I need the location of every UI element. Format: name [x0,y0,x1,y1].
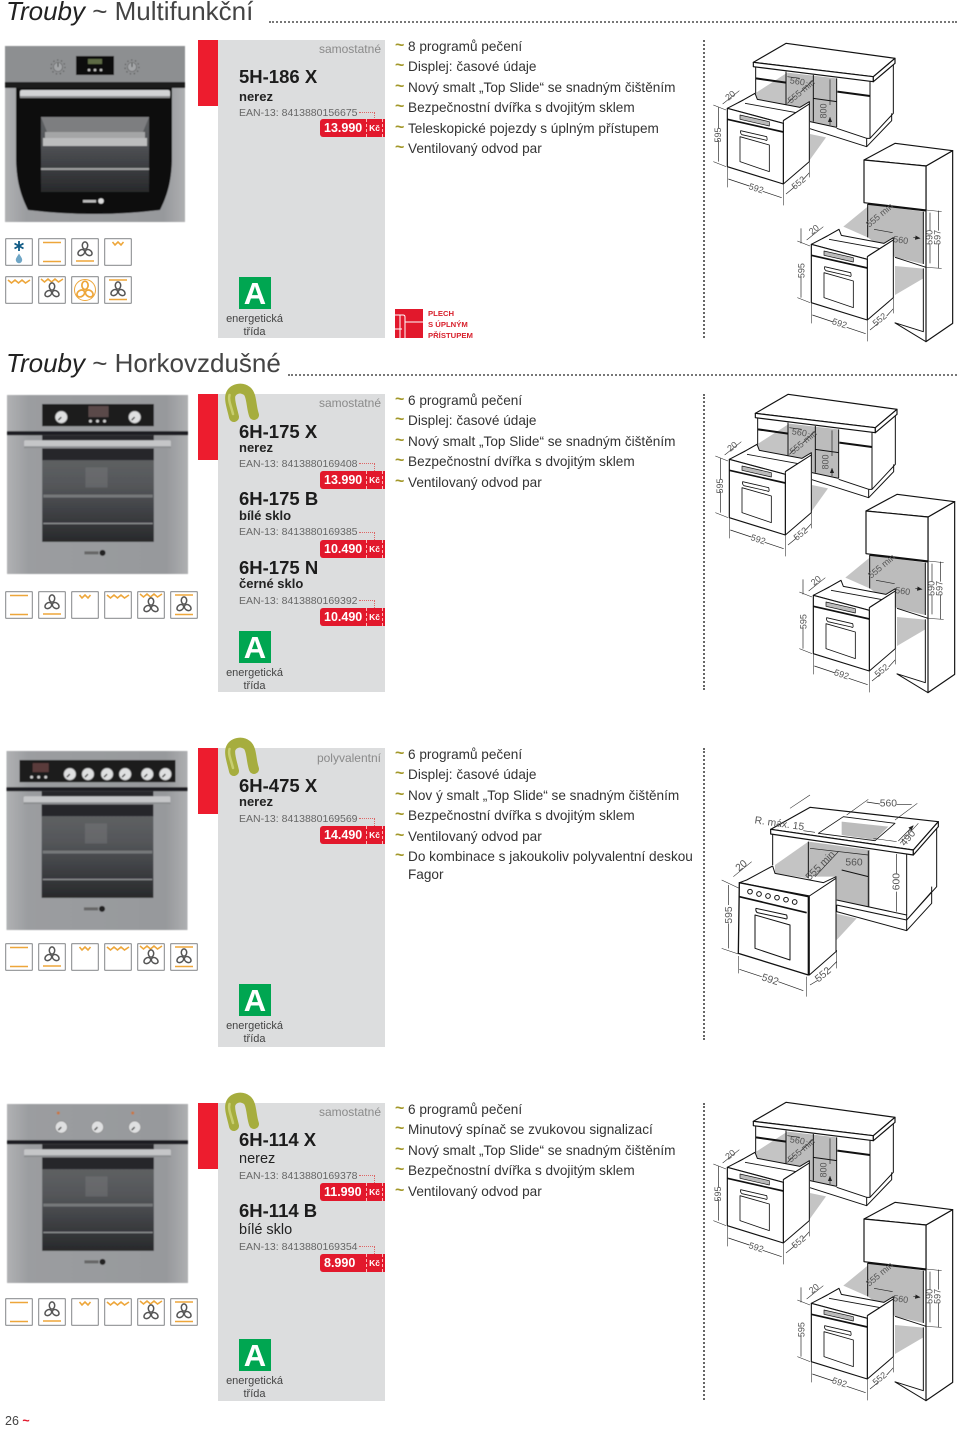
feature list: 6H-475 X: Nov ý smalt „Top Slide“ se snadným čištěním [408,788,679,803]
panel: 6H-114: nerez [239,1151,275,1167]
icons: cooking functions 6H-475 X [5,943,198,971]
diagram: built-in dimensions 6H-175: 597 [934,581,944,596]
price: Kč [369,612,380,622]
icon: green ribbon [225,384,259,422]
diagram: built-in dimensions 6H-114: 552 [871,1370,889,1387]
diagram: built-in dimensions 5H-186 X: 552 [790,174,808,192]
diagram: built-in dimensions 6H-114: 560 [789,1134,806,1146]
accent: red tab [198,394,218,460]
price: 13.990 [324,120,362,134]
price: 14.490 [324,828,362,842]
diagram: built-in dimensions 6H-175: 560 [895,585,911,597]
diagram: built-in dimensions 6H-475 X: 552 [813,965,834,985]
diagram: built-in dimensions 5H-186 X: 597 [932,230,942,245]
panel: 6H-175: nerez [239,440,273,455]
diagram: built-in dimensions 6H-114: 552 [790,1233,808,1251]
icon: defrost [6,239,32,265]
panel: 6H-114: bílé sklo [239,1222,292,1238]
diagram: built-in dimensions 6H-114: 592 [748,1240,765,1254]
badge: plech s úplným přístupem: PŘÍSTUPEM [428,331,473,340]
price [320,1254,385,1272]
feature list: 6H-475 X: Bezpečnostní dvířka s dvojitým sklem [408,808,635,823]
panel: 5H-186 X [218,40,385,338]
diagram: built-in dimensions 6H-114: 595 [713,1186,723,1202]
oven photo: 5H-186 X [4,45,186,222]
panel: 6H-114: EAN-13: 8413880169354 [239,1240,358,1252]
feature list: 6H-175: Displej: časové údaje [408,413,536,428]
energy class [239,277,271,309]
diagram: built-in dimensions 6H-475 X: 490 [899,828,918,849]
panel: 5H-186 X: energetická [226,313,283,325]
feature list: 5H-186 X: Teleskopické pojezdy s úplným přístupem [408,121,659,136]
icons: cooking functions 5H-186 X [5,238,132,304]
energy class [239,631,271,663]
diagram: built-in dimensions 6H-175: 555 min [866,552,897,580]
price [320,608,385,626]
diagram: built-in dimensions 5H-186 X: 555 min [786,77,817,105]
feature list: 6H-175 [396,393,675,490]
diagram: built-in dimensions 6H-475 X [722,794,939,997]
page number: 26 ~ [5,1414,30,1428]
diagram: built-in dimensions 6H-475 X: 560 [880,799,897,810]
feature list: 5H-186 X: Nový smalt „Top Slide“ se snadným čištěním [408,80,675,95]
oven photo: 6H-175 [6,394,189,575]
panel: 5H-186 X: samostatné [319,42,381,56]
diagram: built-in dimensions 5H-186 X: 595 [796,263,806,278]
price [320,540,385,558]
price: Kč [369,475,380,485]
feature list: 6H-475 X: Displej: časové údaje [408,767,536,782]
panel: 6H-475 X: třída [243,1032,266,1044]
diagram: built-in dimensions 5H-186 X: 20 [723,88,737,103]
price: Kč [369,830,380,840]
energy class [239,984,271,1016]
diagram: built-in dimensions 6H-114: 590 [924,1289,934,1304]
diagram: built-in dimensions 5H-186 X: 552 [871,311,889,328]
diagram: built-in dimensions 5H-186 X [713,42,954,342]
feature list: 6H-114: Ventilovaný odvod par [408,1184,542,1199]
panel: 6H-175: EAN-13: 8413880169408 [239,458,358,470]
feature list: 5H-186 X: Displej: časové údaje [408,59,536,74]
panel: 5H-186 X: nerez [239,89,273,104]
panel: 6H-175: samostatné [319,396,381,410]
badge: plech s úplným přístupem: S ÚPLNÝM [428,320,468,329]
feature list: 6H-114: 6 programů pečení [408,1102,522,1117]
energy class: A [244,630,266,665]
panel: 6H-175 [218,394,385,692]
diagram: built-in dimensions 6H-475 X: 555 min [804,849,838,883]
diagram: built-in dimensions 5H-186 X: 800 [818,103,828,119]
icons: cooking functions 6H-175 [5,591,198,619]
feature list: 5H-186 X: Bezpečnostní dvířka s dvojitým sklem [408,100,635,115]
diagram: built-in dimensions 6H-475 X: 592 [760,972,780,988]
model 6H-114 B: 6H-114 B [239,1200,317,1221]
price: 13.990 [324,473,362,487]
diagram: built-in dimensions 6H-114: 555 min [786,1136,817,1164]
diagram: built-in dimensions 6H-175: 595 [798,614,808,629]
panel: 6H-475 X [218,748,385,1047]
diagram: built-in dimensions 6H-175: 555 min [788,428,819,456]
diagram: built-in dimensions 6H-114 [713,1102,954,1402]
diagram: built-in dimensions 5H-186 X: 592 [748,181,765,195]
feature list: 6H-175: Ventilovaný odvod par [408,475,542,490]
price: 8.990 [324,1256,355,1270]
panel: 6H-114: samostatné [319,1105,381,1119]
diagram: built-in dimensions 5H-186 X: 595 [713,127,723,143]
price [320,1183,385,1201]
price: 10.490 [324,610,362,624]
panel: 6H-475 X: nerez [239,794,273,809]
diagram: built-in dimensions 6H-175: 20 [809,573,823,588]
diagram: built-in dimensions 6H-475 X: 560 [845,857,863,868]
diagram: built-in dimensions 6H-475 X: R. máx. 15 [754,815,805,833]
feature list: 6H-175: Nový smalt „Top Slide“ se snadným čištěním [408,434,675,449]
accent: red tab [198,1103,218,1169]
feature list: 6H-114: Nový smalt „Top Slide“ se snadným čištěním [408,1143,675,1158]
diagram: built-in dimensions 6H-175: 592 [750,532,767,546]
panel: 6H-175: bílé sklo [239,508,291,523]
feature list: 6H-114: Bezpečnostní dvířka s dvojitým sklem [408,1163,635,1178]
price [320,826,385,844]
icon: green ribbon [225,1092,259,1131]
feature list: 6H-175: Bezpečnostní dvířka s dvojitým sklem [408,454,635,469]
diagram: built-in dimensions 6H-114: 597 [932,1289,942,1304]
diagram: built-in dimensions 6H-114: 20 [723,1147,737,1162]
badge: plech s úplným přístupem: PLECH [428,309,454,318]
accent: red tab [198,748,218,814]
diagram: built-in dimensions 6H-175: 800 [820,454,830,470]
feature list: 5H-186 X [396,39,675,156]
panel: 5H-186 X: třída [243,326,266,338]
diagram: built-in dimensions 6H-475 X: 600 [891,873,902,890]
panel: 5H-186 X: EAN-13: 8413880156675 [239,106,358,118]
feature list: 6H-475 X: Ventilovaný odvod par [408,829,542,844]
panel: 6H-175: třída [243,680,266,692]
panel: 6H-114: EAN-13: 8413880169378 [239,1170,358,1182]
panel: 6H-114: energetická [226,1375,283,1387]
oven photo: 6H-114 [6,1103,189,1284]
diagram: built-in dimensions 6H-114: 560 [893,1293,909,1305]
diagram: built-in dimensions 6H-114: 592 [831,1375,848,1389]
icons: cooking functions 6H-114 [5,1298,198,1326]
diagram: built-in dimensions 5H-186 X: 592 [831,316,848,330]
badge: plech s úplným přístupem [395,309,473,340]
feature list: 6H-114: Minutový spínač se zvukovou signalizací [408,1122,653,1137]
diagram: built-in dimensions 6H-114: 800 [818,1162,828,1178]
panel: 6H-475 X: polyvalentní [317,751,381,765]
model 6H-114 X: 6H-114 X [239,1129,316,1150]
model 6H-175 B: 6H-175 B [239,488,318,509]
energy class: A [244,983,266,1018]
feature list: 6H-475 X: 6 programů pečení [408,747,522,762]
accent: red tab [198,40,218,106]
price: 11.990 [324,1185,362,1199]
diagram: built-in dimensions 5H-186 X: 590 [924,230,934,245]
panel: 6H-175: EAN-13: 8413880169392 [239,594,358,606]
panel: 6H-175: černé sklo [239,576,303,591]
feature list: 6H-475 X: Do kombinace s jakoukoliv polyvalentní deskou Fagor [408,849,693,882]
energy class: A [244,276,266,311]
diagram: built-in dimensions 6H-475 X: 20 [734,858,750,874]
price: Kč [369,122,380,132]
model name: 6H-475 X [239,775,317,796]
price: Kč [369,544,380,554]
diagram: built-in dimensions 6H-175: 595 [715,478,725,494]
diagram: built-in dimensions 6H-475 X: 595 [724,906,735,924]
price: Kč [369,1187,380,1197]
diagram: built-in dimensions 6H-175: 20 [725,439,739,454]
diagram: built-in dimensions 6H-175 [715,394,956,694]
feature list: 5H-186 X: 8 programů pečení [408,39,522,54]
diagram: built-in dimensions 6H-175: 560 [791,426,808,438]
price [320,471,385,489]
panel: 6H-175: EAN-13: 8413880169385 [239,526,358,538]
energy class [239,1339,271,1371]
diagram: built-in dimensions 6H-175: 552 [792,525,810,543]
diagram: built-in dimensions 6H-175: 552 [873,662,891,679]
panel: 6H-475 X: energetická [226,1020,283,1032]
diagram: built-in dimensions 6H-114: 20 [807,1281,821,1296]
heading: Trouby Horkovzdušné: Trouby ~ Horkovzdušné [6,348,281,378]
diagram: built-in dimensions 6H-114: 595 [796,1322,806,1337]
icon: top and bottom heat [6,592,32,618]
icon: top and bottom heat [6,944,32,970]
diagram: built-in dimensions 5H-186 X: 560 [893,234,909,246]
energy class: A [244,1338,266,1373]
panel: 6H-175: energetická [226,667,283,679]
feature list: 6H-475 X [396,747,693,882]
panel: 6H-114 [218,1103,385,1401]
diagram: built-in dimensions 6H-175: 590 [926,581,936,596]
model 6H-175 N: 6H-175 N [239,557,318,578]
diagram: built-in dimensions 5H-186 X: 560 [789,75,806,87]
icon: green ribbon [225,738,259,776]
feature list: 5H-186 X: Ventilovaný odvod par [408,141,542,156]
diagram: built-in dimensions 6H-175: 592 [833,667,850,681]
diagram: built-in dimensions 6H-114: 555 min [864,1260,895,1288]
price: 10.490 [324,542,362,556]
oven photo: 6H-475 X [6,750,188,930]
panel: 6H-475 X: EAN-13: 8413880169569 [239,812,358,824]
panel: 6H-114: třída [243,1388,266,1400]
price: Kč [369,1258,380,1268]
model name: 5H-186 X [239,66,317,87]
diagram: built-in dimensions 5H-186 X: 555 min [864,201,895,229]
price [320,118,385,136]
model 6H-175 X: 6H-175 X [239,421,317,442]
icon: top and bottom heat [6,1299,32,1325]
feature list: 6H-114 [396,1102,675,1199]
feature list: 6H-175: 6 programů pečení [408,393,522,408]
diagram: built-in dimensions 5H-186 X: 20 [807,222,821,237]
